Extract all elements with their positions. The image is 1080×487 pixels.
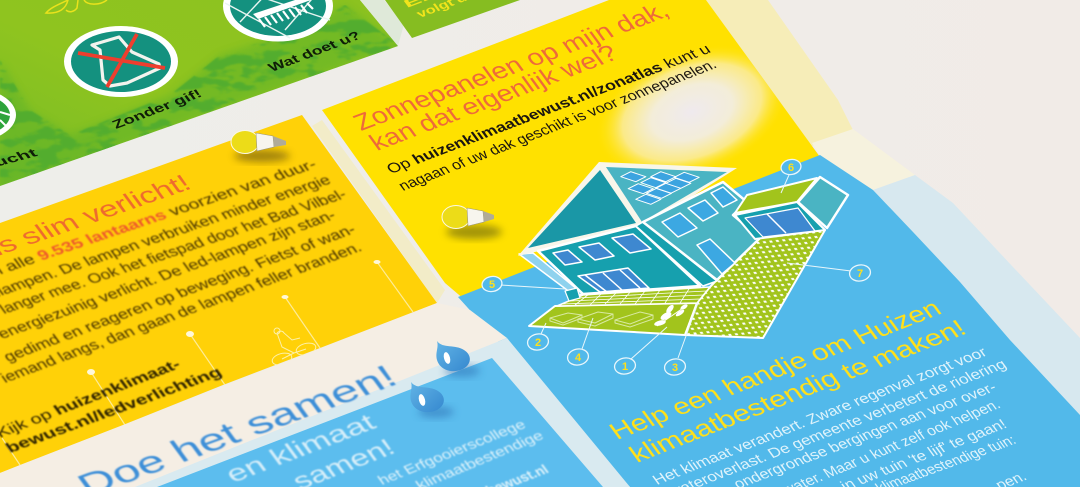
icon: bulb on yellow panel bbox=[442, 206, 502, 239]
callout 1 bbox=[613, 356, 637, 376]
house underside bbox=[519, 253, 583, 296]
roof backing bbox=[518, 162, 737, 256]
callout lines bbox=[500, 175, 851, 359]
lamp posts bbox=[2, 262, 413, 465]
panel: pale green strip bbox=[360, 0, 404, 46]
callout 5: 5 bbox=[489, 279, 495, 291]
text: lighting body: energiezuinig verlicht. De led-lampen zijn stan- bbox=[0, 207, 339, 342]
icon: butterfly bbox=[46, 0, 107, 13]
panel: solar yellow bbox=[322, 0, 820, 300]
grass texture bbox=[0, 5, 400, 190]
callout 6: 6 bbox=[788, 162, 794, 174]
plant bbox=[654, 303, 688, 327]
callout 2: 2 bbox=[535, 337, 541, 349]
heading: help: klimaatbestendig te maken! bbox=[624, 315, 972, 468]
icon: cyclist bbox=[271, 328, 317, 367]
callout 1: 1 bbox=[622, 361, 628, 373]
icon: water drop lower bbox=[410, 382, 454, 418]
heading: solar: kan dat eigenlijk wel? bbox=[364, 40, 623, 156]
panel: pale blue fold bbox=[873, 175, 1080, 415]
callout 6 bbox=[780, 158, 802, 176]
icon: no chemicals bbox=[64, 26, 178, 97]
heading: en klimaat samen: en klimaat bbox=[220, 409, 381, 487]
callout 3 bbox=[663, 357, 687, 377]
annex side bbox=[798, 177, 848, 228]
garden: lawn bbox=[529, 303, 697, 335]
heading: solar: Zonnepanelen op mijn dak, bbox=[348, 0, 675, 136]
text: lighting body bbox=[0, 157, 365, 386]
illustration: climate house bbox=[481, 158, 872, 377]
text: solar body: nagaan of uw dak geschikt is voor zonnepanelen. bbox=[395, 57, 720, 194]
callout 4 bbox=[566, 347, 590, 367]
panel: pale yellow fold bbox=[706, 0, 853, 146]
label: Wat doet u: Wat doet u? bbox=[265, 28, 364, 74]
text: top green panel bbox=[401, 0, 478, 20]
icon: rake bbox=[223, 0, 333, 42]
text: do it together body bbox=[374, 417, 552, 487]
sun glow bbox=[602, 49, 780, 166]
lamp heads bbox=[87, 260, 380, 375]
callout 7: 7 bbox=[857, 268, 863, 280]
icon: water drop upper bbox=[436, 341, 480, 377]
text: help body: Het klimaat verandert. Zware regenval zorgt voor bbox=[649, 344, 990, 487]
side wall bbox=[643, 182, 760, 280]
panel: do it together bbox=[157, 358, 603, 487]
panel: pale blue strip bbox=[135, 338, 630, 487]
callout 4: 4 bbox=[575, 352, 582, 364]
text: lighting link: bewust.nl/ledverlichting bbox=[2, 364, 226, 456]
heading: help: Help een handje om Huizen bbox=[604, 295, 947, 445]
panel: warm paper gap bbox=[0, 303, 507, 487]
rain barrel bbox=[565, 288, 580, 301]
text: do it together body: het Erfgooierscollege bbox=[374, 417, 529, 487]
side wall windows bbox=[662, 187, 737, 274]
text: lighting body: langer mee. Ook het fietspad door het Bad Vilbel- bbox=[0, 187, 350, 317]
label: Zonder gif: Zonder gif! bbox=[109, 86, 205, 131]
panel: orange smart lighting bbox=[0, 115, 437, 473]
front wall bbox=[538, 226, 700, 294]
annex front bbox=[735, 202, 825, 239]
side strip bbox=[636, 222, 717, 286]
panel: green wild garden bbox=[0, 0, 400, 190]
callout 5 bbox=[481, 275, 503, 293]
left roof bbox=[528, 170, 636, 248]
planters bbox=[550, 312, 653, 327]
terrace tiles bbox=[557, 287, 710, 306]
right roof bbox=[606, 167, 727, 222]
panel: green top right bbox=[385, 0, 520, 38]
callout 2 bbox=[526, 332, 550, 352]
panel: blue garden bbox=[458, 155, 1080, 487]
panel: cream fold bbox=[812, 129, 915, 190]
heading: help bbox=[604, 295, 972, 468]
callout 7 bbox=[848, 263, 872, 283]
text: lighting body: iemand langs, dan gaan de lampen feller branden. bbox=[0, 240, 365, 386]
text: solar body: Op huizenklimaatbewust.nl/zonatlas kunt u bbox=[383, 41, 714, 177]
icon: partial circle left bbox=[0, 88, 16, 142]
callout 3: 3 bbox=[672, 362, 678, 374]
icon: bulb on orange panel bbox=[231, 130, 290, 162]
annex roof bbox=[735, 178, 817, 213]
text: lighting link bbox=[0, 357, 226, 456]
panel: pale cream strip by orange bbox=[312, 120, 445, 303]
garden: gravel bbox=[685, 230, 825, 338]
text: lighting body: gedimd en reageren op beweging. Fietst of wan- bbox=[0, 222, 359, 365]
solar panels bbox=[621, 172, 699, 204]
front wall windows bbox=[553, 234, 651, 292]
heading: en klimaat samen bbox=[220, 409, 400, 487]
